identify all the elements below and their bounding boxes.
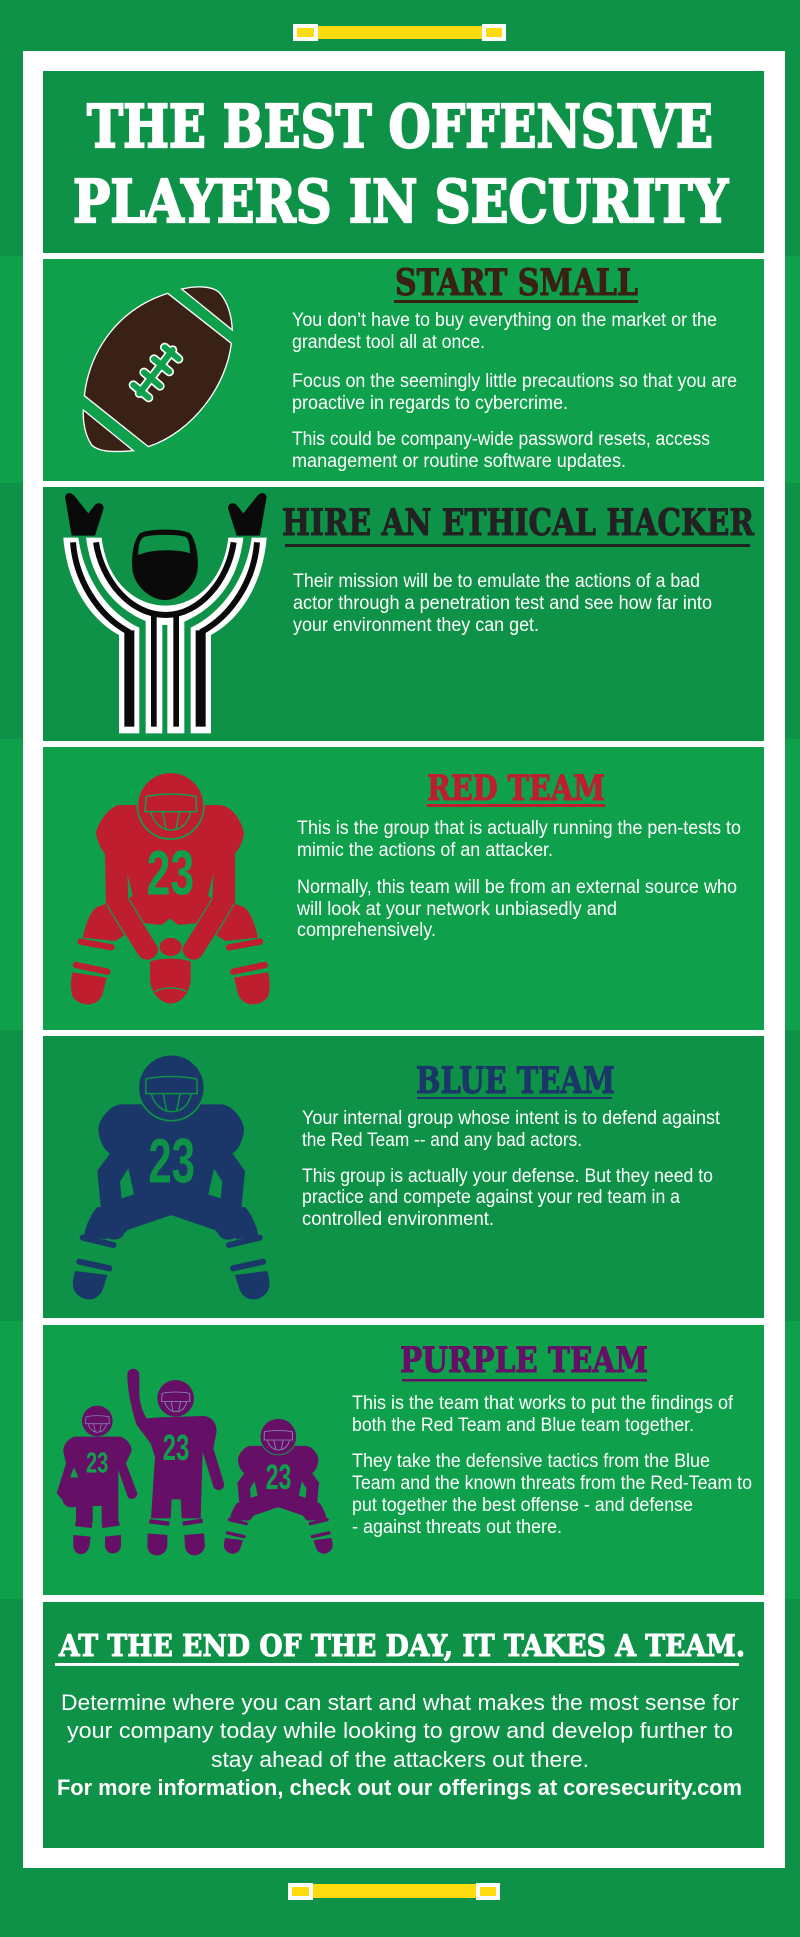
panel: hire an ethical hacker [43, 487, 764, 741]
player: holding ball: 23 [86, 1448, 108, 1480]
text block: hire: your environment they can get. [293, 615, 539, 636]
text block: purple team: Team and the known threats from the Red-Team to [352, 1473, 752, 1494]
text block: blue team: the Red Team -- and any bad actors. [302, 1130, 582, 1151]
icon: top goal post [295, 26, 504, 39]
text block: purple team: This is the team that works to put the findings of [352, 1393, 734, 1414]
panel: blue team [43, 1036, 764, 1318]
heading: start small: START SMALL [395, 262, 638, 304]
text block: purple team: put together the best offense - and defense [352, 1495, 693, 1516]
player: crouching [224, 1418, 333, 1554]
text block: blue team: practice and compete against your red team in a [302, 1187, 680, 1208]
icon: red player [71, 772, 270, 1004]
player: holding ball [57, 1406, 137, 1554]
text block: red team [296, 818, 741, 941]
text block: start small: proactive in regards to cybercrime. [292, 393, 568, 414]
text block: purple team: both the Red Team and Blue team together. [352, 1415, 694, 1436]
icon: referee [63, 493, 267, 733]
text block: hire: actor through a penetration test and see how far into [293, 593, 712, 614]
text block: red team: mimic the actions of an attacker. [297, 840, 553, 861]
text block: blue team: controlled environment. [302, 1209, 494, 1230]
text block: blue team: This group is actually your defense. But they need to [302, 1166, 713, 1187]
icon: football [83, 287, 232, 452]
text block: hire [293, 571, 712, 636]
text block: blue team [302, 1108, 721, 1230]
panel: red team [43, 747, 764, 1030]
player: crouching: 23 [266, 1458, 291, 1497]
heading: purple team: PURPLE TEAM [400, 1340, 648, 1381]
player: arm raised [127, 1369, 224, 1555]
text block: blue team: Your internal group whose intent is to defend against [302, 1108, 721, 1129]
text block: closing: stay ahead of the attackers out there. [211, 1747, 589, 1772]
text block: closing [57, 1690, 742, 1800]
text block: start small: grandest tool all at once. [292, 332, 485, 353]
text block: start small: You don’t have to buy everything on the market or the [292, 310, 717, 331]
text block: red team: will look at your network unbiasedly and [296, 899, 617, 920]
icon: blue player: 23 [148, 1126, 195, 1196]
heading: red team: RED TEAM [427, 768, 605, 809]
text block: start small [292, 310, 737, 472]
text block: purple team [352, 1393, 752, 1538]
heading: blue team: BLUE TEAM [416, 1060, 615, 1102]
text block: closing: your company today while looking to grow and develop further to [67, 1718, 733, 1743]
panel: title [43, 71, 764, 253]
text block: purple team: - against threats out there. [352, 1517, 562, 1538]
text block: red team: Normally, this team will be from an external source who [297, 877, 737, 898]
text block: purple team: They take the defensive tactics from the Blue [352, 1451, 710, 1472]
text block: red team: This is the group that is actually running the pen-tests to [297, 818, 741, 839]
icon: blue player [73, 1055, 269, 1299]
text block: closing: For more information, check out our offerings at coresecurity.com [57, 1775, 742, 1800]
text block: start small: Focus on the seemingly little precautions so that you are [292, 371, 737, 392]
text block: start small: management or routine software updates. [292, 451, 626, 472]
icon: purple players [57, 1369, 333, 1555]
text block: start small: This could be company-wide password resets, access [292, 429, 710, 450]
panel: start small [43, 259, 764, 481]
text block: closing: Determine where you can start and what makes the most sense for [61, 1690, 740, 1715]
panel: purple team [43, 1325, 764, 1595]
icon: bottom goal post [290, 1884, 498, 1898]
player: arm raised: 23 [163, 1427, 189, 1468]
title [73, 92, 729, 236]
icon: red player: 23 [147, 838, 194, 908]
text block: red team: comprehensively. [297, 920, 436, 941]
text block: hire: Their mission will be to emulate the actions of a bad [293, 571, 700, 592]
panel: closing [43, 1602, 764, 1848]
